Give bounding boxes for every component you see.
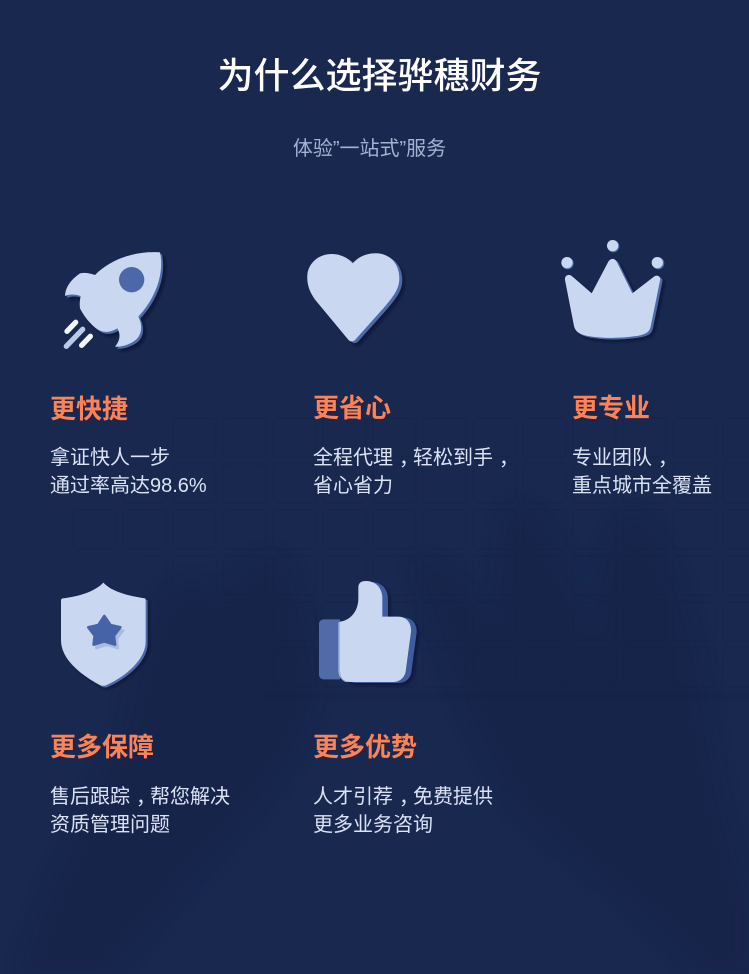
text: professional [572, 447, 712, 497]
icon: shield with star [61, 583, 150, 689]
text: advantages: 更多业务咨询 [313, 814, 433, 836]
text: peace of mind: 省心省力 [313, 475, 393, 497]
heading: faster: 更快捷 [50, 394, 128, 424]
text: assurance: 资质管理问题 [50, 814, 170, 836]
panel: advantages [313, 732, 493, 836]
icon: rocket [65, 252, 166, 351]
text: assurance [50, 786, 230, 836]
text: peace of mind: 全程代理 ，轻松到手 ， [313, 447, 519, 470]
heading: peace of mind: 更省心 [313, 393, 391, 423]
text: professional: 专业团队 ， [572, 447, 678, 470]
heading: professional: 更专业 [572, 393, 650, 423]
icon: crown [561, 240, 665, 342]
text: advantages: 人才引荐 ，免费提供 [313, 786, 493, 809]
heading: advantages: 更多优势 [313, 732, 417, 762]
heading: assurance: 更多保障 [50, 732, 154, 762]
text: faster: 拿证快人一步 [50, 447, 170, 469]
panel: faster [50, 394, 207, 497]
panel: professional [572, 393, 712, 497]
title: 为什么选择骅穗财务 [217, 55, 542, 96]
text: peace of mind [313, 446, 519, 497]
text: assurance: 售后跟踪 ，帮您解决 [50, 786, 230, 809]
subtitle: 体验”一站式”服务 [293, 138, 446, 160]
text: professional: 重点城市全覆盖 [572, 475, 712, 497]
text: advantages [313, 786, 493, 836]
panel: peace of mind [313, 393, 519, 497]
icon: heart [307, 253, 405, 346]
icon: thumbs up [319, 581, 419, 685]
text: faster [50, 446, 207, 497]
text: faster: 通过率高达98.6% [50, 475, 207, 497]
panel: assurance [50, 732, 230, 836]
